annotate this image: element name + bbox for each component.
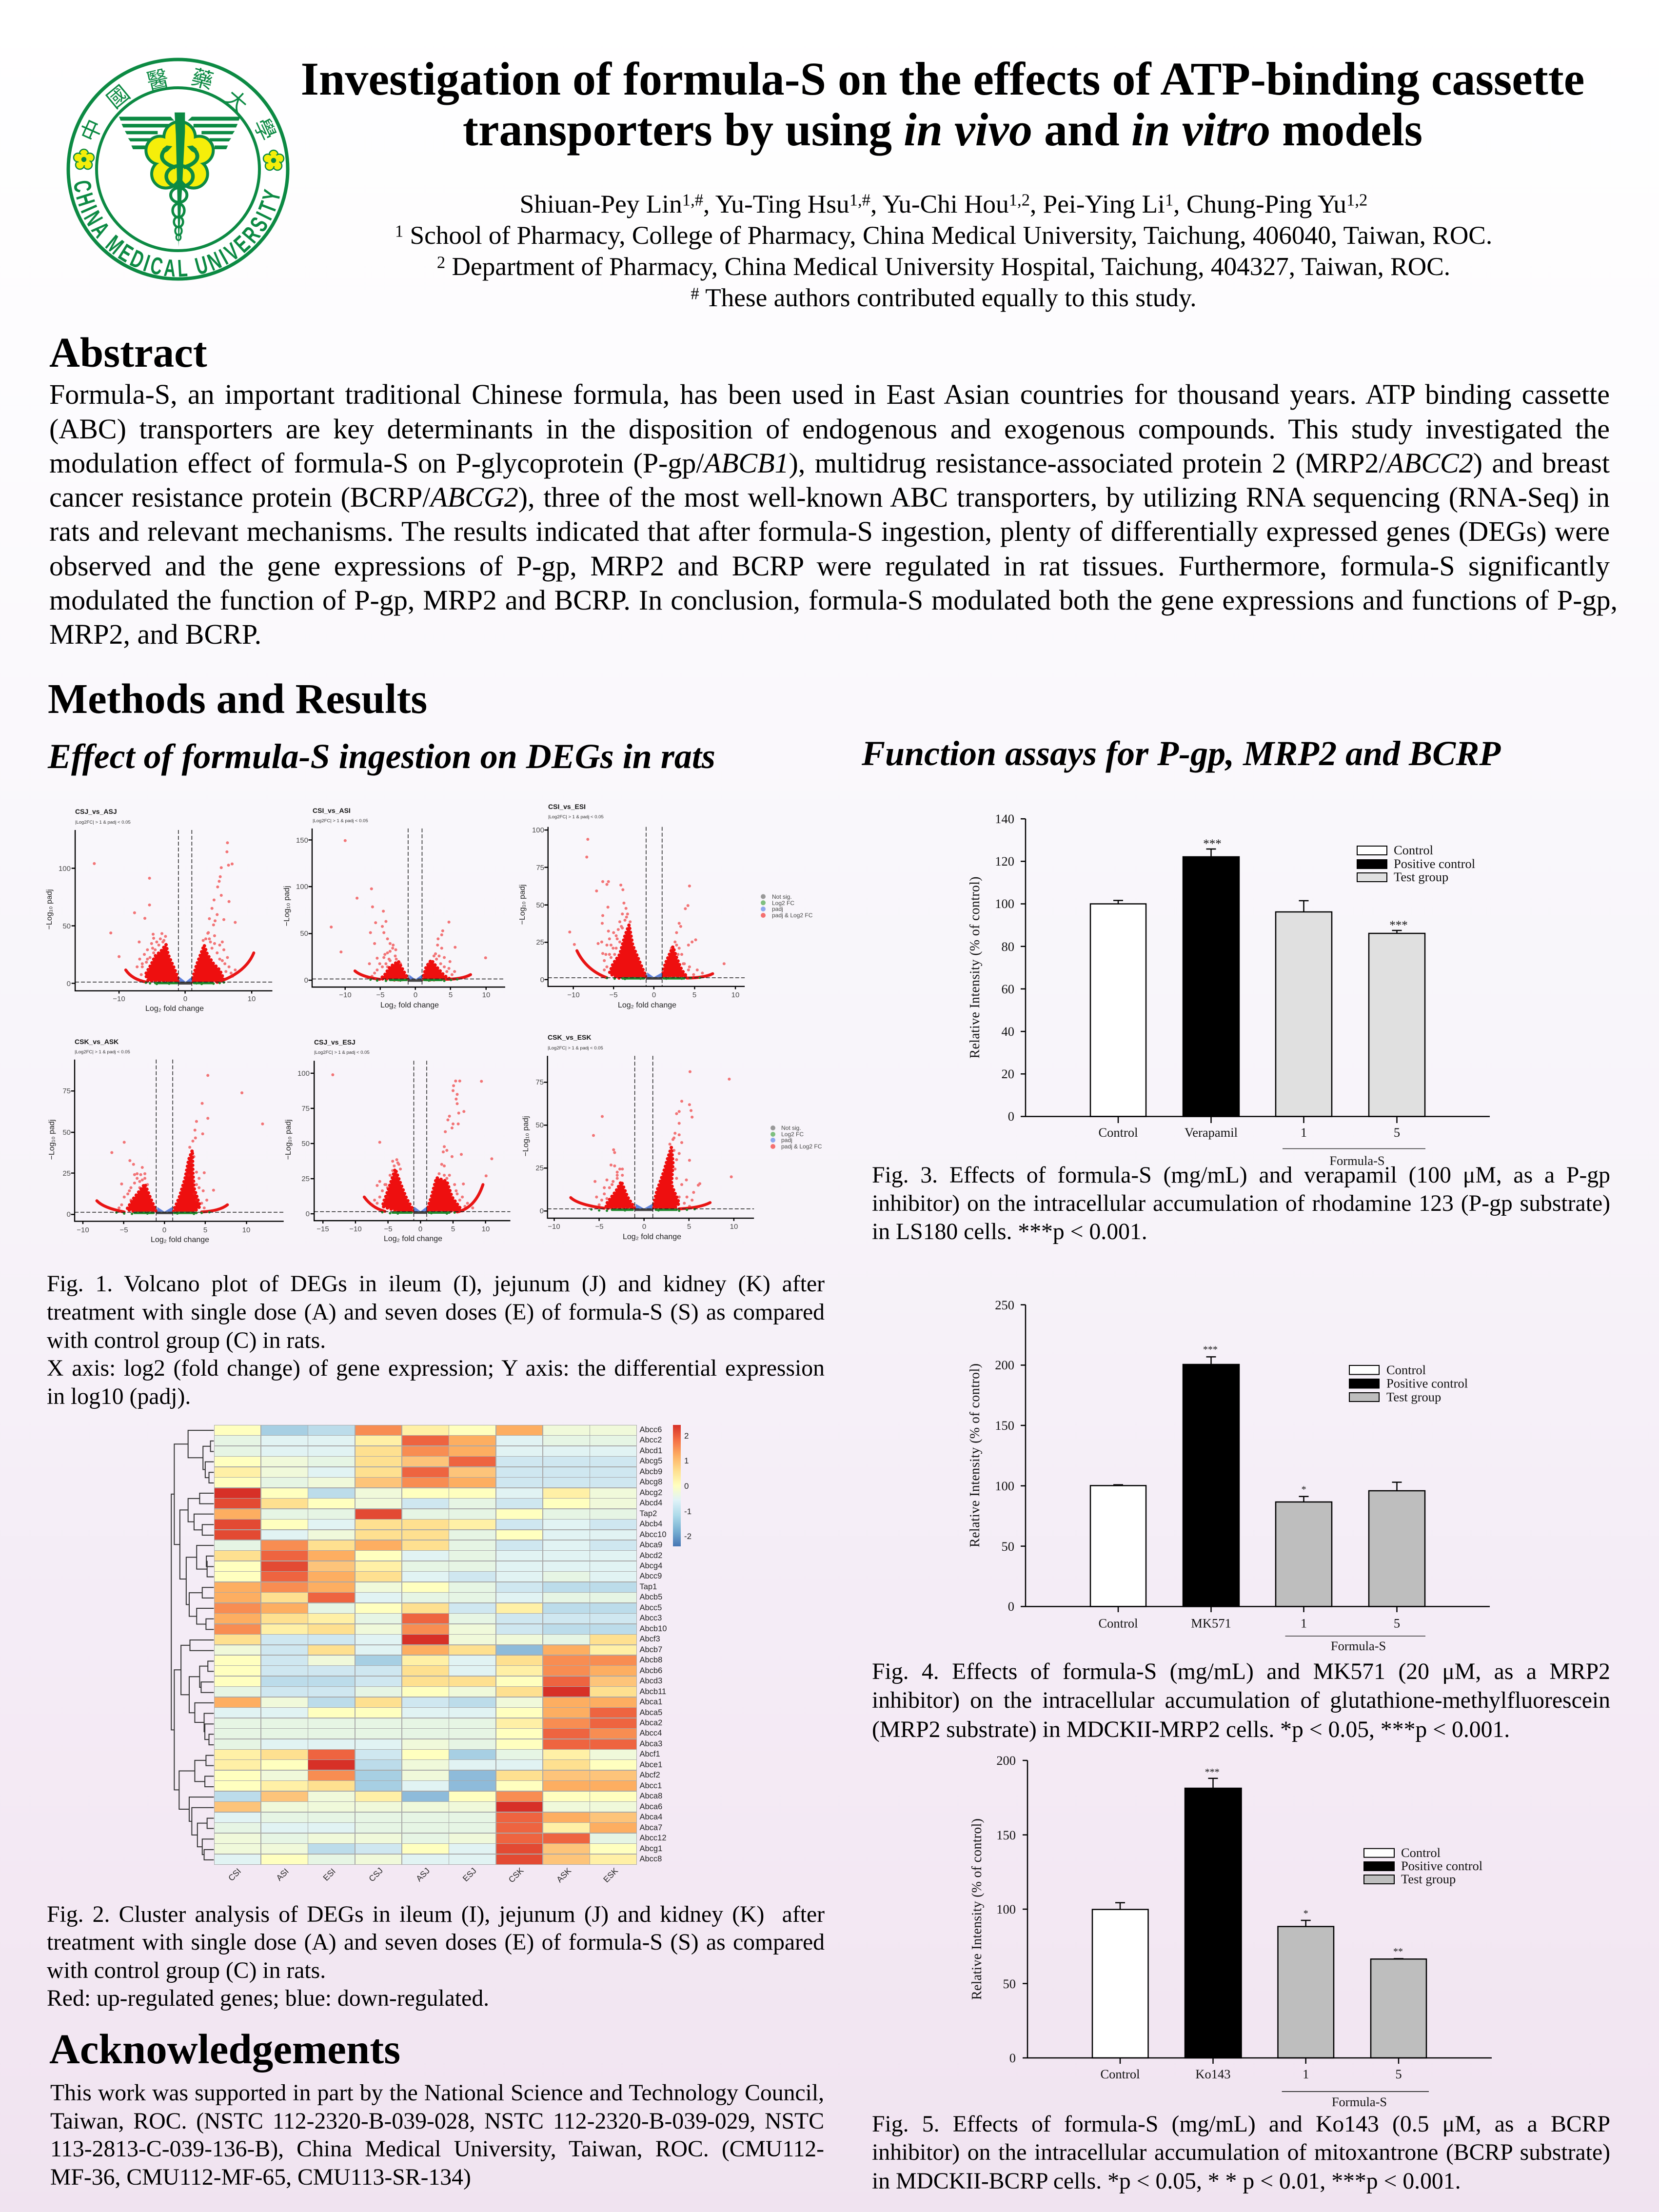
volcano plot: CSK_vs_ASK: −5 — [119, 1226, 128, 1234]
heatmap row labels: Abcb11 — [640, 1687, 666, 1696]
volcano plot: CSK_vs_ASK: 25 — [62, 1169, 71, 1178]
figure 1 caption — [47, 1271, 825, 1409]
heatmap colour scale: 2 — [684, 1431, 689, 1441]
y tick labels: 120 — [995, 854, 1014, 869]
subheading: Effect of formula-S ingestion: Effect of formula-S ingestion on DEGs in rats — [48, 737, 715, 776]
logo: China Medical University seal: 國 — [99, 77, 135, 114]
authors and affiliations: # These authors contributed equally to this study. — [691, 283, 1197, 312]
legend: Test group — [1401, 1872, 1456, 1886]
volcano plot: CSK_vs_ASK: −Log₁₀ padj — [48, 1120, 56, 1160]
volcano plot: CSI_vs_ASI: 50 — [300, 929, 308, 938]
legend: Control — [1394, 843, 1433, 857]
legend: Control — [1401, 1845, 1441, 1860]
significance stars: *** — [1203, 837, 1222, 850]
heatmap row labels: Abca3 — [640, 1739, 662, 1748]
figure 4 caption: Fig. 4. Effects of formula-S (mg/mL) and MK571 (20 μM, as a MRP2 — [872, 1659, 1610, 1684]
volcano plot: CSK_vs_ESK: 10 — [730, 1223, 738, 1231]
volcano plot: CSI_vs_ESI: |Log2FC| > 1 & padj < 0.05 — [548, 814, 604, 820]
heatmap colour scale — [673, 1425, 691, 1546]
abstract text: cancer resistance protein (BCRP/ABCG2), three of the most well-known ABC transporters, by utilizing RNA sequencing (RNA-Seq) in — [49, 481, 1610, 513]
figure 3 caption — [872, 1161, 1610, 1246]
volcano plot: CSK_vs_ESK: 0 — [642, 1223, 646, 1231]
abstract text: Formula-S, an important traditional Chinese formula, has been used in East Asian countries for thousand years. ATP binding cassette — [49, 378, 1610, 410]
bars — [1090, 1364, 1425, 1606]
volcano plot: CSK_vs_ASK: CSK_vs_ASK — [75, 1038, 118, 1046]
legend: Positive control — [1386, 1376, 1468, 1391]
volcano plot: CSK_vs_ESK: 25 — [535, 1164, 544, 1172]
heatmap row labels: Abca9 — [640, 1540, 662, 1549]
heading: Acknowledgements: Acknowledgements — [49, 2025, 400, 2073]
heatmap column labels: CSI — [227, 1867, 243, 1883]
x tick labels — [1101, 2067, 1402, 2081]
legend: Test group — [1386, 1390, 1441, 1404]
legend: Positive control — [1394, 856, 1475, 871]
acknowledgements text: Taiwan, ROC. (NSTC 112-2320-B-039-028, NSTC 112-2320-B-039-029, NSTC — [50, 2108, 824, 2134]
figure 5 caption: inhibitor) on the intracellular accumulation of mitoxantrone (BCRP substrate) — [872, 2139, 1610, 2165]
heatmap row labels: Abcg8 — [640, 1478, 662, 1486]
y tick labels — [995, 811, 1014, 1124]
volcano plot: CSJ_vs_ESJ: 5 — [451, 1225, 455, 1233]
y axis title: Relative Intensity (% of control) — [968, 1363, 983, 1547]
heatmap colour scale: -1 — [684, 1507, 691, 1516]
volcano plot: CSI_vs_ASI: −10 — [339, 991, 352, 999]
heatmap row labels: Abcg1 — [640, 1844, 662, 1853]
y tick labels: 100 — [995, 1479, 1014, 1493]
heatmap column labels: ASK — [555, 1866, 573, 1884]
volcano legend: bottom row — [770, 1125, 822, 1150]
volcano plot: CSI_vs_ESI: −Log₁₀ padj — [518, 885, 527, 925]
heatmap colour scale: 0 — [684, 1481, 689, 1491]
volcano plot: CSI_vs_ESI: 50 — [536, 901, 544, 909]
abstract text: observed and the gene expressions of P-gp, MRP2 and BCRP were regulated in rat tissues. Furthermore, formula-S significantly — [49, 550, 1610, 582]
volcano legend: top row — [761, 893, 813, 919]
volcano plot: CSI_vs_ESI: 0 — [540, 976, 544, 984]
volcano plot: CSI_vs_ESI: Log₂ fold change — [618, 1001, 676, 1009]
heatmap row labels: Abcb6 — [640, 1666, 662, 1675]
heatmap row labels: Abca2 — [640, 1718, 662, 1727]
legend: Test group — [1394, 869, 1448, 884]
acknowledgements text — [50, 2079, 824, 2191]
y tick labels: 200 — [995, 1358, 1014, 1372]
volcano plot: CSJ_vs_ASJ: CSJ_vs_ASJ — [75, 808, 117, 815]
heatmap row labels: Abca7 — [640, 1823, 662, 1832]
heatmap column labels: ASJ — [415, 1866, 432, 1883]
logo: China Medical University seal: 中 — [71, 114, 108, 146]
x tick labels: MK571 — [1191, 1616, 1231, 1631]
logo: China Medical University seal: 藥 — [188, 59, 217, 96]
y tick labels — [996, 1753, 1016, 2065]
y tick labels: 40 — [1002, 1024, 1014, 1039]
volcano legend: bottom row: padj & Log2 FC — [781, 1143, 822, 1150]
volcano plot: CSK_vs_ASK: Log₂ fold change — [151, 1236, 209, 1244]
x tick labels: 1 — [1301, 1616, 1307, 1631]
figure 4 caption — [872, 1657, 1610, 1744]
volcano legend: bottom row: Not sig. — [781, 1125, 801, 1131]
volcano plot: CSI_vs_ASI: 0 — [304, 976, 308, 985]
heatmap row labels: Tap2 — [640, 1509, 657, 1518]
legend — [1364, 1845, 1482, 1886]
y axis title: Relative Intensity (% of control) — [969, 1818, 985, 2000]
volcano legend: bottom row: Log2 FC — [781, 1131, 804, 1138]
x tick labels — [1099, 1616, 1400, 1631]
figure 5 caption: Fig. 5. Effects of formula-S (mg/mL) and Ko143 (0.5 μM, as a BCRP — [872, 2111, 1610, 2137]
heatmap row labels: Abcc1 — [640, 1781, 662, 1790]
volcano plot: CSJ_vs_ESJ: |Log2FC| > 1 & padj < 0.05 — [314, 1050, 370, 1055]
significance stars: * — [1304, 1908, 1308, 1919]
significance stars: * — [1302, 1484, 1306, 1495]
figure 2 caption: treatment with single dose (A) and seven doses (E) of formula-S (S) as compared — [47, 1929, 825, 1955]
heading: Methods and Results: Methods and Results — [48, 675, 427, 722]
volcano plot: CSI_vs_ASI: −5 — [376, 991, 385, 999]
volcano plot: CSJ_vs_ASJ: |Log2FC| > 1 & padj < 0.05 — [75, 820, 131, 825]
authors and affiliations — [395, 190, 1492, 312]
legend: Positive control — [1401, 1858, 1482, 1873]
volcano plot: CSJ_vs_ESJ: 50 — [301, 1140, 310, 1148]
heatmap row labels: Abcd4 — [640, 1499, 662, 1507]
abstract text: MRP2, and BCRP. — [49, 618, 261, 650]
figure 2 caption: Red: up-regulated genes; blue: down-regulated. — [47, 1985, 489, 2011]
heatmap row labels: Abcb5 — [640, 1593, 662, 1601]
volcano plot: CSJ_vs_ASJ: Log₂ fold change — [145, 1005, 204, 1013]
error bars — [1113, 1357, 1402, 1502]
acknowledgements text: This work was supported in part by the National Science and Technology Council, — [50, 2080, 824, 2106]
heatmap row labels: Abcd1 — [640, 1446, 662, 1455]
title — [301, 53, 1584, 156]
volcano plot: CSK_vs_ESK: 5 — [687, 1223, 691, 1231]
volcano legend: top row: Not sig. — [772, 893, 792, 900]
volcano plot: CSJ_vs_ESJ: Log₂ fold change — [384, 1235, 442, 1243]
y tick labels: 250 — [995, 1298, 1014, 1312]
heatmap row labels: Abcd2 — [640, 1551, 662, 1560]
x tick labels: Control — [1101, 2067, 1140, 2081]
volcano legend: top row: padj & Log2 FC — [772, 912, 813, 919]
figure 5 caption: in MDCKII-BCRP cells. *p < 0.05, * * p < 0.01, ***p < 0.001. — [872, 2168, 1461, 2194]
heatmap row labels: Abcc10 — [640, 1530, 667, 1539]
volcano plot: CSK_vs_ESK: 50 — [535, 1121, 544, 1129]
heatmap row labels: Abcb4 — [640, 1520, 662, 1528]
volcano plot: CSK_vs_ESK: Log₂ fold change — [623, 1233, 681, 1241]
volcano plot: CSJ_vs_ASJ: 0 — [183, 995, 187, 1003]
x tick labels: 1 — [1301, 1125, 1307, 1140]
heatmap row labels: Abcc3 — [640, 1614, 662, 1622]
x tick labels: 1 — [1303, 2067, 1309, 2081]
error bars — [1115, 1778, 1403, 1958]
abstract text: modulation effect of formula-S on P-glycoprotein (P-gp/ABCB1), multidrug resistance-associated protein 2 (MRP2/ABCC2) and breast — [49, 447, 1610, 479]
volcano plot: CSK_vs_ESK: CSK_vs_ESK — [548, 1033, 591, 1041]
volcano plot: CSI_vs_ASI — [283, 807, 505, 1009]
heatmap row labels: Abca1 — [640, 1698, 662, 1706]
figure 1 caption: Fig. 1. Volcano plot of DEGs in ileum (I), jejunum (J) and kidney (K) after — [47, 1271, 825, 1297]
axes — [1023, 1760, 1492, 2064]
significance stars: *** — [1205, 1767, 1220, 1778]
acknowledgements text: 113-2813-C-039-136-B), China Medical University, Taiwan, ROC. (CMU112- — [50, 2136, 824, 2162]
volcano plot: CSI_vs_ESI: 75 — [536, 864, 544, 872]
volcano plot: CSJ_vs_ASJ: −10 — [113, 995, 125, 1003]
bars — [1092, 1788, 1426, 2058]
y tick labels: 200 — [996, 1753, 1016, 1768]
volcano plot: CSJ_vs_ASJ: 0 — [67, 980, 71, 988]
logo: China Medical University seal: 學 — [247, 112, 285, 145]
volcano plot: CSK_vs_ESK: −Log₁₀ padj — [522, 1116, 530, 1156]
figure 4 caption: (MRP2 substrate) in MDCKII-MRP2 cells. *p < 0.05, ***p < 0.001. — [872, 1717, 1510, 1742]
y tick labels: 60 — [1002, 982, 1014, 996]
heatmap column labels: ASI — [275, 1867, 291, 1883]
x tick labels: Verapamil — [1185, 1125, 1238, 1140]
heading: Abstract: Abstract — [49, 329, 207, 376]
volcano plot: CSI_vs_ESI: 10 — [731, 991, 739, 999]
heatmap row labels: Tap1 — [640, 1582, 657, 1591]
volcano plot: CSJ_vs_ESJ: −15 — [316, 1225, 329, 1233]
y tick labels: 50 — [1003, 1976, 1016, 1991]
volcano plot: CSK_vs_ASK: 0 — [162, 1226, 166, 1234]
volcano plot: CSI_vs_ASI: 5 — [449, 991, 453, 999]
figure 2 caption: Fig. 2. Cluster analysis of DEGs in ileum (I), jejunum (J) and kidney (K) after — [47, 1901, 825, 1927]
heatmap row labels — [640, 1425, 667, 1863]
subheading: Function assays: Function assays for P-gp, MRP2 and BCRP — [862, 734, 1501, 773]
volcano plot: CSI_vs_ESI: −5 — [609, 991, 618, 999]
volcano plot: CSJ_vs_ESJ: 100 — [297, 1069, 310, 1078]
volcano plot: CSJ_vs_ESJ: 25 — [301, 1175, 310, 1183]
y tick labels: 0 — [1008, 1109, 1014, 1124]
volcano plot: CSK_vs_ASK: 5 — [203, 1226, 207, 1234]
logo: China Medical University seal — [66, 58, 290, 281]
heatmap row labels: Abcg4 — [640, 1561, 662, 1570]
volcano plot: CSJ_vs_ESJ: CSJ_vs_ESJ — [314, 1038, 356, 1046]
heatmap row labels: Abce1 — [640, 1760, 662, 1769]
figure 4: MRP2 bar chart — [956, 1292, 1502, 1658]
heatmap column labels: ESI — [321, 1867, 337, 1883]
volcano plot: CSI_vs_ASI: |Log2FC| > 1 & padj < 0.05 — [313, 818, 368, 824]
abstract text: (ABC) transporters are key determinants in the disposition of endogenous and exogenous compounds. This study investigated the — [49, 413, 1610, 445]
axes — [1021, 1305, 1490, 1612]
volcano legend: top row: Log2 FC — [772, 900, 794, 907]
heatmap row labels: Abcf1 — [640, 1750, 660, 1758]
volcano plot: CSI_vs_ESI — [518, 803, 745, 1009]
figure 3 caption: in LS180 cells. ***p < 0.001. — [872, 1219, 1147, 1244]
heatmap row labels: Abca6 — [640, 1802, 662, 1811]
y tick labels — [995, 1298, 1014, 1614]
volcano plot: CSJ_vs_ESJ: 75 — [301, 1105, 310, 1113]
significance stars — [1203, 1344, 1306, 1495]
title: Investigation of formula-S on the effects of ATP-binding cassette — [301, 53, 1584, 105]
heatmap row labels: Abcg5 — [640, 1457, 662, 1465]
figure 1 caption: with control group (C) in rats. — [47, 1327, 326, 1353]
heatmap row labels: Abcf2 — [640, 1771, 660, 1779]
figure 2 caption: with control group (C) in rats. — [47, 1957, 326, 1983]
y tick labels: 50 — [1002, 1539, 1014, 1554]
y tick labels: 100 — [996, 1902, 1016, 1916]
heatmap row labels: Abcc9 — [640, 1572, 662, 1580]
figure 5 caption — [872, 2110, 1610, 2195]
acknowledgements text: MF-36, CMU112-MF-65, CMU113-SR-134) — [50, 2164, 471, 2190]
heatmap row labels: Abcf3 — [640, 1635, 660, 1643]
heatmap row labels: Abcc8 — [640, 1855, 662, 1863]
x tick labels: 5 — [1394, 1125, 1400, 1140]
volcano plot: CSK_vs_ESK: −10 — [548, 1223, 560, 1231]
heatmap row labels: Abcc2 — [640, 1436, 662, 1444]
heatmap column labels: CSJ — [367, 1866, 385, 1883]
figure 3: P-gp bar chart — [956, 810, 1502, 1170]
logo: China Medical University seal: 醫 — [143, 60, 171, 96]
authors and affiliations: 2 Department of Pharmacy, China Medical University Hospital, Taichung, 404327, Taiwan, ROC. — [437, 252, 1450, 281]
authors and affiliations: 1 School of Pharmacy, College of Pharmacy, China Medical University, Taichung, 406040, Taiwan, ROC. — [395, 221, 1492, 250]
heatmap column labels: CSK — [507, 1866, 526, 1884]
y tick labels: 20 — [1002, 1066, 1014, 1081]
figure 4 caption: inhibitor) on the intracellular accumulation of glutathione-methylfluorescein — [872, 1687, 1610, 1713]
legend: Control — [1386, 1363, 1426, 1377]
volcano plot: CSI_vs_ASI: 100 — [296, 883, 308, 891]
title: transporters by using in vivo and in vitro models — [463, 103, 1422, 156]
x tick labels: Ko143 — [1195, 2067, 1231, 2081]
heatmap column labels — [227, 1866, 620, 1884]
heatmap row labels: Abcc6 — [640, 1425, 662, 1434]
y axis title: Relative Intensity (% of control) — [968, 877, 983, 1058]
logo: China Medical University seal: 大 — [219, 81, 256, 118]
formula-S bracket: Formula-S — [1332, 2094, 1387, 2109]
y tick labels: 140 — [995, 811, 1014, 826]
volcano plot: CSI_vs_ASI: 0 — [414, 991, 417, 999]
volcano plot: CSK_vs_ASK: 50 — [62, 1128, 71, 1137]
volcano plot: CSK_vs_ASK — [48, 1038, 284, 1244]
volcano plot: CSK_vs_ASK: 75 — [62, 1087, 71, 1095]
heatmap row labels: Abca4 — [640, 1813, 662, 1821]
volcano plot: CSJ_vs_ESJ: 10 — [482, 1225, 490, 1233]
heatmap row labels: Abca8 — [640, 1792, 662, 1800]
x tick labels: Control — [1099, 1616, 1138, 1631]
volcano legend: top row: padj — [772, 906, 783, 912]
authors and affiliations: Shiuan-Pey Lin1,#, Yu-Ting Hsu1,#, Yu-Chi Hou1,2, Pei-Ying Li1, Chung-Ping Yu1,2 — [520, 190, 1367, 218]
heatmap row labels: Abcb10 — [640, 1624, 667, 1633]
volcano plot: CSJ_vs_ASJ — [45, 808, 272, 1013]
significance stars — [1205, 1767, 1403, 1957]
bars — [1090, 857, 1425, 1117]
heatmap colour scale: 1 — [684, 1456, 689, 1465]
volcano plot: CSJ_vs_ESJ — [284, 1038, 511, 1243]
volcano plot: CSK_vs_ESK: 0 — [540, 1207, 544, 1215]
dendrogram — [171, 1430, 214, 1860]
volcano plot: CSK_vs_ASK: |Log2FC| > 1 & padj < 0.05 — [75, 1049, 130, 1055]
figure 3 caption: inhibitor) on the intracellular accumulation of rhodamine 123 (P-gp substrate) — [872, 1190, 1610, 1216]
y tick labels: 80 — [1002, 939, 1014, 954]
volcano plot: CSI_vs_ESI: 25 — [536, 938, 544, 947]
volcano legend: bottom row: padj — [781, 1137, 792, 1144]
x tick labels: 5 — [1394, 1616, 1400, 1631]
volcano plot: CSI_vs_ASI: Log₂ fold change — [380, 1001, 439, 1009]
volcano plot: CSJ_vs_ASJ: 10 — [248, 995, 256, 1003]
volcano plot: CSI_vs_ESI: −10 — [567, 991, 580, 999]
heatmap row labels: Abcb7 — [640, 1645, 662, 1654]
legend — [1357, 843, 1475, 884]
figure 2 caption — [47, 1901, 825, 2011]
volcano plot: CSI_vs_ESI: 5 — [692, 991, 696, 999]
volcano plot: CSK_vs_ASK: 0 — [67, 1210, 71, 1219]
figure 1 caption: in log10 (padj). — [47, 1383, 191, 1409]
y tick labels: 100 — [995, 896, 1014, 911]
volcano plot: CSI_vs_ESI: 100 — [532, 826, 544, 834]
heatmap row labels: Abcb9 — [640, 1467, 662, 1476]
error bars — [1113, 849, 1402, 933]
figure 1 caption: X axis: log2 (fold change) of gene expression; Y axis: the differential expression — [47, 1355, 825, 1381]
legend — [1349, 1363, 1468, 1404]
significance stars: ** — [1393, 1946, 1403, 1957]
heatmap colour scale: -2 — [684, 1532, 691, 1541]
significance stars: *** — [1203, 1344, 1218, 1355]
heatmap column labels: ESJ — [461, 1866, 478, 1883]
volcano plot: CSI_vs_ASI: −Log₁₀ padj — [283, 886, 291, 926]
volcano plot: CSI_vs_ASI: CSI_vs_ASI — [313, 807, 351, 814]
formula-S bracket: Formula-S — [1329, 1153, 1385, 1168]
significance stars: *** — [1389, 919, 1408, 932]
logo: China Medical University seal: CHINA MEDICAL UNIVERSITY — [74, 180, 280, 277]
volcano plot: CSK_vs_ESK: |Log2FC| > 1 & padj < 0.05 — [548, 1046, 603, 1051]
volcano plot: CSI_vs_ESI: CSI_vs_ESI — [548, 803, 586, 810]
heatmap column labels: ESK — [602, 1866, 620, 1884]
abstract text: rats and relevant mechanisms. The results indicated that after formula-S ingestion, plenty of differentially expressed genes (DEGs) were — [49, 515, 1610, 547]
volcano plot: CSJ_vs_ESJ: −10 — [349, 1225, 362, 1233]
x tick labels — [1099, 1125, 1400, 1140]
heatmap row labels: Abcg2 — [640, 1488, 662, 1497]
figure 5: BCRP bar chart — [956, 1751, 1502, 2112]
y tick labels: 0 — [1008, 1599, 1014, 1614]
volcano plot: CSK_vs_ASK: −10 — [77, 1226, 89, 1234]
abstract text: modulated the function of P-gp, MRP2 and BCRP. In conclusion, formula-S modulated both the gene expressions and functions of P-gp, — [49, 584, 1618, 616]
volcano plot: CSJ_vs_ASJ: 50 — [62, 922, 71, 930]
volcano plot: CSJ_vs_ASJ: 100 — [59, 865, 71, 873]
formula-S bracket: Formula-S — [1331, 1639, 1386, 1653]
volcano plot: CSI_vs_ASI: 10 — [482, 991, 490, 999]
figure 3 caption: Fig. 3. Effects of formula-S (mg/mL) and verapamil (100 μM, as a P-gp — [872, 1162, 1610, 1188]
volcano plot: CSI_vs_ASI: 150 — [296, 836, 308, 845]
volcano plot: CSJ_vs_ESJ: 0 — [306, 1210, 310, 1218]
x tick labels: 5 — [1395, 2067, 1402, 2081]
volcano plot: CSJ_vs_ESJ: −Log₁₀ padj — [284, 1120, 293, 1160]
heatmap row labels: Abcd3 — [640, 1677, 662, 1685]
x tick labels: Control — [1099, 1125, 1138, 1140]
heatmap row labels: Abcb8 — [640, 1656, 662, 1664]
volcano plot: CSK_vs_ESK — [522, 1033, 754, 1241]
heatmap row labels: Abcc4 — [640, 1729, 662, 1738]
figure 1 caption: treatment with single dose (A) and seven doses (E) of formula-S (S) as compared — [47, 1299, 825, 1325]
abstract text — [49, 378, 1618, 650]
heatmap row labels: Abcc5 — [640, 1603, 662, 1612]
volcano plot: CSI_vs_ESI: 0 — [652, 991, 656, 999]
heatmap row labels: Abcc12 — [640, 1834, 667, 1842]
volcano plot: CSJ_vs_ESJ: 0 — [418, 1225, 422, 1233]
volcano plot: CSJ_vs_ESJ: −5 — [384, 1225, 393, 1233]
heatmap cells — [214, 1425, 637, 1865]
y tick labels: 0 — [1009, 2051, 1016, 2065]
figure 1: volcano plots — [45, 803, 822, 1244]
axes — [1021, 819, 1490, 1123]
volcano plot: CSK_vs_ASK: 10 — [242, 1226, 250, 1234]
figure 2: cluster heatmap — [171, 1425, 691, 1884]
significance stars — [1203, 837, 1408, 932]
volcano plot: CSJ_vs_ASJ: −Log₁₀ padj — [45, 889, 54, 929]
heatmap row labels: Abca5 — [640, 1708, 662, 1717]
y tick labels: 150 — [996, 1828, 1016, 1842]
y tick labels: 150 — [995, 1418, 1014, 1433]
volcano plot: CSK_vs_ESK: 75 — [535, 1078, 544, 1086]
volcano plot: CSK_vs_ESK: −5 — [595, 1223, 604, 1231]
